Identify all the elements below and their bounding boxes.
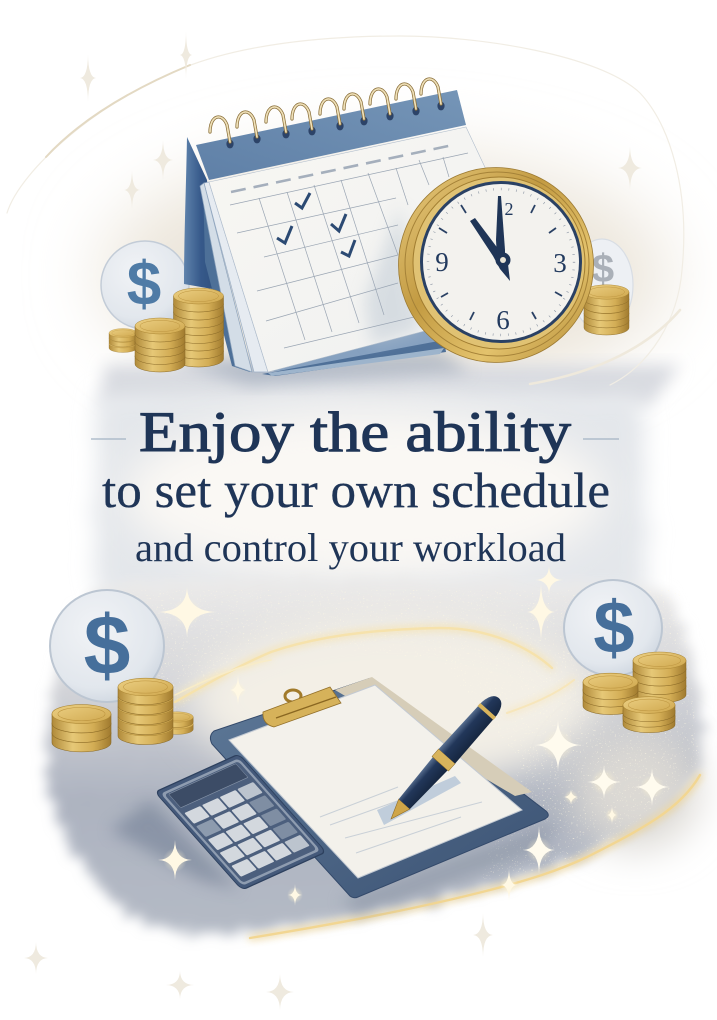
clock hands <box>470 196 510 281</box>
pen barrel <box>397 756 449 811</box>
clock face <box>423 184 579 340</box>
calendar grid <box>230 153 468 348</box>
dollar bubble: bottom left: $ <box>84 598 130 692</box>
calendar page <box>209 127 547 372</box>
swoosh: faint top arc <box>7 36 684 385</box>
dollar bubble: top right <box>571 239 633 331</box>
calculator keys <box>184 782 310 877</box>
clock frame <box>398 168 594 362</box>
dollar bubble: bottom right: $ <box>593 586 635 669</box>
dollar bubble: top left: $ <box>127 250 161 319</box>
pen cap <box>439 691 507 764</box>
title side dashes <box>91 438 619 440</box>
wall clock <box>398 168 594 362</box>
clipboard shadow <box>340 820 560 915</box>
spiral rings <box>210 79 445 148</box>
calendar blue header band <box>196 90 466 180</box>
background: wash behind calendar <box>100 150 680 405</box>
clipboard clip <box>263 687 341 727</box>
clock shadow on page <box>365 205 420 345</box>
swoosh: golden arcs <box>175 628 700 938</box>
calculator shadow <box>110 800 240 890</box>
dollar bubble: top left <box>101 241 189 329</box>
hour ticks <box>439 205 562 320</box>
coin stack: top right <box>584 285 629 335</box>
background: wash behind clipboard scene <box>46 578 702 934</box>
calculator <box>110 754 326 890</box>
title text <box>102 401 610 570</box>
coin stacks: bottom right <box>583 652 686 733</box>
title line 2: to set your own schedule <box>102 462 610 518</box>
pen nib <box>385 799 410 824</box>
clipboard <box>210 677 560 915</box>
calendar back cover <box>184 137 218 290</box>
tan back sheet <box>335 677 532 796</box>
coin stacks: bottom left <box>52 678 193 752</box>
dollar bubble: bottom left <box>50 590 164 702</box>
dollar bubble: top right: $ <box>592 247 614 291</box>
minute ticks <box>428 189 574 335</box>
clipboard board <box>210 678 548 898</box>
pen shadow <box>377 776 461 825</box>
clock numerals: 9 <box>435 247 449 277</box>
coin stacks: top left <box>109 288 224 372</box>
pen band <box>432 749 455 771</box>
calendar bottom sheets <box>262 327 450 376</box>
background: wash behind title <box>95 392 650 600</box>
clipboard paper <box>229 685 522 878</box>
calendar shadow <box>170 350 470 385</box>
title line 1: Enjoy the ability <box>139 401 572 464</box>
check marks <box>277 193 355 256</box>
sparkles: bottom scene <box>157 566 670 906</box>
calendar back pages <box>200 182 268 372</box>
header dashes <box>231 145 453 192</box>
clock numerals: 6 <box>496 305 510 335</box>
clock numerals: 3 <box>553 248 567 278</box>
clock numerals <box>435 199 567 335</box>
dollar bubble: bottom right <box>564 580 662 676</box>
clock numerals: 2 <box>504 199 514 219</box>
pen <box>377 691 507 826</box>
calendar <box>170 79 547 385</box>
calculator screen <box>169 764 248 808</box>
pen cap ring <box>478 703 496 720</box>
title line 3: and control your workload <box>135 525 566 570</box>
calculator body <box>155 754 326 890</box>
writing lines <box>320 787 482 853</box>
